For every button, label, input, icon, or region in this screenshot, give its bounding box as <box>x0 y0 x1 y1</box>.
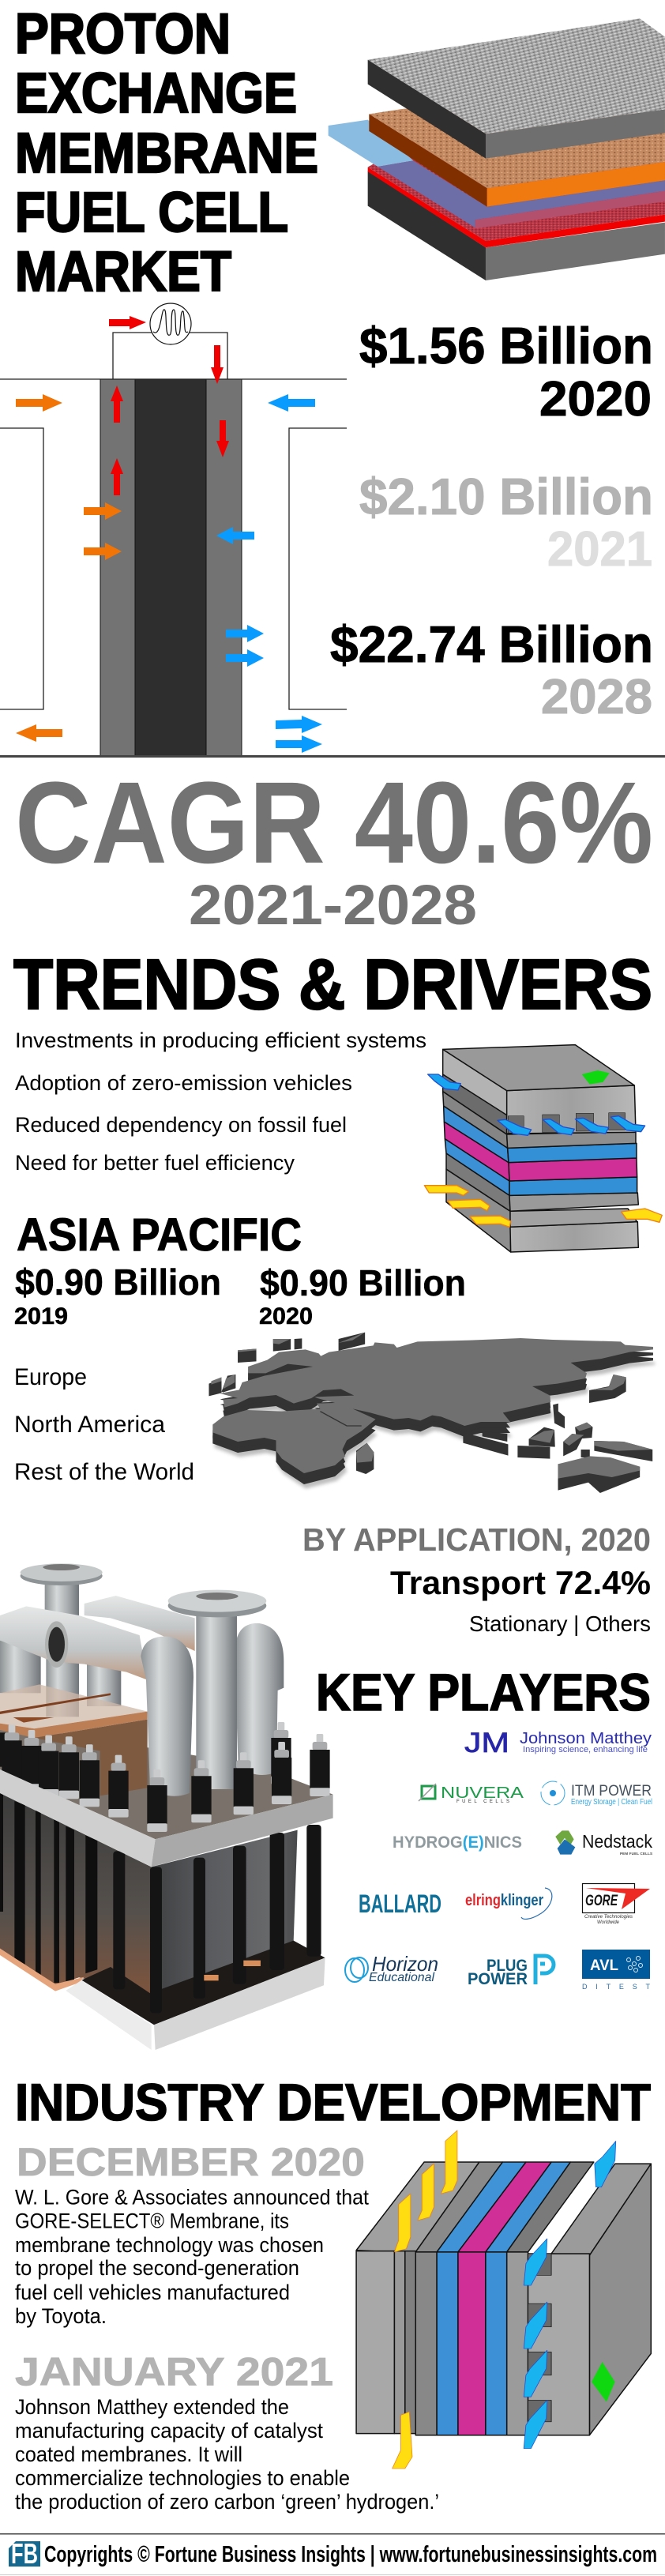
icon: lamp <box>150 303 191 344</box>
logo: Nuvera <box>419 1784 524 1804</box>
logo: Johnson Matthey: JM <box>464 1728 509 1758</box>
icon: green marker <box>582 1070 610 1085</box>
application share: BY APPLICATION, 2020 <box>302 1521 651 1558</box>
market size figures: 2021 <box>547 522 652 577</box>
arrows: hydrogen flow <box>16 394 122 742</box>
market size figures: $1.56 Billion <box>359 317 653 374</box>
arrows: oxygen flow <box>216 394 322 753</box>
market size figures <box>330 317 653 724</box>
development: January 2021: JANUARY 2021 <box>15 2349 333 2394</box>
regional values <box>14 1262 466 1329</box>
logo: AVL Ditest <box>582 1950 651 1991</box>
list: trends <box>15 1029 426 1175</box>
logo: Nuvera: FUEL CELLS <box>456 1799 509 1804</box>
application share: Stationary | Others <box>469 1611 651 1636</box>
development: January 2021: commercialize technologies to enable <box>15 2466 350 2490</box>
logo: Horizon Educational <box>345 1952 438 1984</box>
title: PROTON <box>15 3 231 66</box>
list: regions: Rest of the World <box>14 1459 194 1485</box>
logo: Gore: Worldwide <box>597 1920 619 1925</box>
development: December 2020: to propel the second-generation <box>15 2256 299 2280</box>
logo: Gore: GORE <box>585 1893 618 1909</box>
logo: Nedstack: Nedstack <box>582 1831 652 1852</box>
development: January 2021: coated membranes. It will <box>15 2442 242 2466</box>
application share: Transport 72.4% <box>390 1564 651 1601</box>
illustration: fuel cell layers <box>329 18 665 280</box>
development: December 2020: GORE-SELECT® Membrane, its <box>15 2209 289 2232</box>
regional values: 2019 <box>14 1303 68 1329</box>
list: regions: Europe <box>14 1364 87 1390</box>
logo: Horizon Educational: Horizon <box>372 1952 438 1976</box>
list: trends: Need for better fuel efficiency <box>15 1151 295 1175</box>
logo: Johnson Matthey <box>464 1728 652 1758</box>
stack body <box>0 1793 325 2050</box>
logo: ElringKlinger <box>465 1888 552 1919</box>
logo: ITM Power: ITM POWER <box>571 1783 652 1799</box>
market size figures: 2020 <box>539 372 652 427</box>
logo: Plug Power <box>468 1956 554 1988</box>
title: MEMBRANE <box>15 122 318 185</box>
logo: Nedstack <box>555 1830 652 1856</box>
development: January 2021: Johnson Matthey extended the <box>15 2395 289 2419</box>
upper hardware <box>0 1563 333 1867</box>
list: trends: Reduced dependency on fossil fuel <box>15 1113 347 1137</box>
title: EXCHANGE <box>15 62 297 125</box>
title <box>15 3 318 303</box>
logo: Gore <box>583 1883 650 1925</box>
market size figures: $2.10 Billion <box>359 468 653 525</box>
logo: Johnson Matthey: Johnson Matthey <box>520 1730 652 1747</box>
logo: ElringKlinger: elringklinger <box>465 1892 543 1909</box>
logo: Johnson Matthey: Inspiring science, enhancing life <box>523 1745 648 1754</box>
diagram: fuel cell circuit <box>0 303 347 757</box>
regional values: 2020 <box>259 1303 313 1329</box>
CAGR: 2021-2028 <box>189 874 477 937</box>
central cell columns <box>100 379 242 757</box>
map: eastern hemisphere <box>209 1333 655 1493</box>
arrows: blue inlet <box>428 1074 645 1135</box>
logo: Nedstack: PEM FUEL CELLS <box>620 1852 652 1856</box>
development: January 2021: manufacturing capacity of catalyst <box>15 2419 323 2442</box>
illustration: fuel cell exploded front view <box>356 2130 651 2469</box>
development: December 2020: W. L. Gore & Associates announced that <box>15 2185 369 2209</box>
heading: asia pacific: ASIA PACIFIC <box>17 1209 302 1261</box>
application share <box>302 1521 651 1636</box>
logo: Horizon Educational: Educational <box>369 1971 434 1984</box>
illustration: fuel cell stack <box>424 1045 662 1252</box>
development: December 2020: DECEMBER 2020 <box>17 2140 365 2184</box>
logo: AVL Ditest: DITEST <box>582 1983 651 1991</box>
list: regions: North America <box>14 1412 165 1438</box>
list: regions <box>14 1364 194 1485</box>
list: trends: Adoption of zero-emission vehicles <box>15 1071 352 1095</box>
development: December 2020: by Toyota. <box>15 2304 107 2328</box>
logo: Gore: Creative Technologies <box>584 1914 633 1920</box>
market size figures: $22.74 Billion <box>330 615 653 673</box>
logo: Plug Power: PLUG <box>487 1957 528 1975</box>
development: December 2020 <box>15 2140 369 2328</box>
title: FUEL CELL <box>15 182 288 244</box>
arrows: blue flow <box>524 2141 616 2449</box>
logo: Hydrogenics: HYDROG(E)NICS <box>393 1833 522 1852</box>
market size figures: 2028 <box>541 670 652 724</box>
development: December 2020: membrane technology was chosen <box>15 2233 324 2257</box>
arrows: yellow flow <box>393 2130 457 2469</box>
logo: ITM Power <box>541 1781 652 1807</box>
arrows: electron flow <box>109 316 229 495</box>
regional values: $0.90 Billion <box>15 1262 221 1303</box>
logo: Ballard: BALLARD <box>359 1890 441 1918</box>
icon: green marker <box>592 2362 615 2402</box>
logo: Fortune Business Insights: FB <box>11 2537 38 2570</box>
development: December 2020: fuel cell vehicles manufactured <box>15 2281 290 2304</box>
list: trends: Investments in producing efficient systems <box>15 1029 426 1052</box>
development: January 2021: the production of zero carbon ‘green’ hydrogen.’ <box>15 2490 439 2514</box>
regional values: $0.90 Billion <box>260 1262 466 1303</box>
logo: Plug Power: POWER <box>468 1970 528 1988</box>
title: MARKET <box>15 241 231 303</box>
illustration: fuel cell stack hardware <box>0 1563 333 2050</box>
arrows: yellow inlet <box>424 1186 662 1227</box>
logo: AVL Ditest: AVL <box>590 1957 618 1974</box>
development: January 2021 <box>15 2349 439 2514</box>
logo: Nuvera: NUVERA <box>441 1784 524 1802</box>
